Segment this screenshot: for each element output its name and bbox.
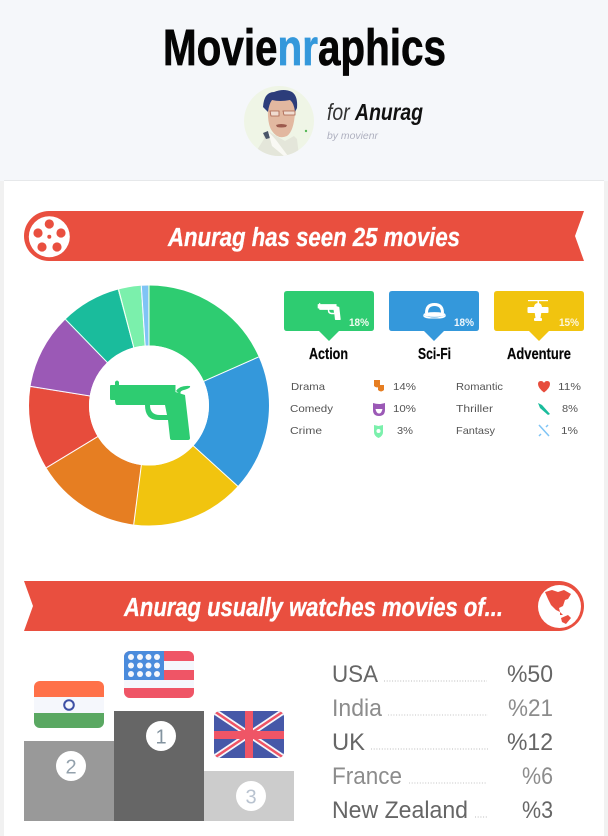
row: France: France — [332, 763, 402, 790]
row: India: India — [332, 695, 383, 722]
row: USA: USA — [332, 661, 378, 688]
banner heading: Anurag has seen 25 movies — [167, 224, 460, 252]
row: UK: UK — [332, 729, 365, 756]
row: Fantasy: 1% — [561, 425, 578, 437]
row: India: %21 — [508, 695, 553, 722]
row: New Zealand — [332, 797, 553, 824]
banner: countries — [24, 581, 584, 631]
row: Romantic — [456, 381, 581, 393]
row: France — [332, 763, 553, 790]
row: USA — [332, 661, 553, 688]
row: Thriller — [456, 403, 578, 415]
row: Drama: Drama — [291, 381, 325, 393]
country ranking list — [332, 661, 553, 824]
label: Adventure — [507, 346, 571, 363]
row: Comedy: 10% — [393, 403, 416, 415]
value: 15% — [559, 317, 579, 329]
card: Sci-Fi — [389, 291, 479, 363]
icon: plane — [528, 300, 548, 321]
icon: pistol — [110, 380, 190, 440]
row: New Zealand: New Zealand — [332, 797, 468, 824]
banner heading: Anurag usually watches movies of... — [123, 594, 503, 622]
row: Thriller: 8% — [562, 403, 578, 415]
row: Crime — [290, 425, 413, 438]
panel: header — [0, 0, 608, 181]
donut chart: genres — [30, 286, 259, 524]
icon: gun — [318, 303, 341, 320]
title: Movienraphics — [163, 19, 446, 76]
icon: UK flag — [214, 711, 284, 758]
label: Action — [309, 346, 348, 363]
row: Crime: Crime — [290, 425, 322, 437]
podium: 1st: 1 — [155, 726, 167, 748]
value: 18% — [349, 317, 369, 329]
row: Comedy — [290, 403, 416, 416]
row: UK: %12 — [507, 729, 553, 756]
label: Sci-Fi — [418, 346, 451, 363]
row: Drama — [291, 380, 416, 393]
legend: other genres — [290, 380, 581, 438]
icon: USA flag — [124, 651, 194, 698]
icon: avatar portrait — [244, 86, 314, 156]
icon: ufo — [423, 303, 446, 318]
row: Fantasy — [456, 425, 578, 437]
row: Drama: 14% — [393, 381, 416, 393]
card: Adventure — [494, 291, 584, 363]
row: France: %6 — [522, 763, 553, 790]
podium: 2nd — [24, 741, 114, 821]
row: UK — [332, 729, 553, 756]
podium: 2nd: 2 — [65, 756, 77, 778]
row: New Zealand: %3 — [522, 797, 553, 824]
podium: 1st — [114, 711, 204, 821]
banner: seen movies — [24, 211, 584, 261]
podium: 3rd — [204, 771, 294, 821]
row: Thriller: Thriller — [456, 403, 494, 415]
row: USA: %50 — [507, 661, 553, 688]
text: for Anurag: for Anurag — [327, 99, 423, 125]
icon: India flag — [34, 681, 104, 728]
icon: film reel — [29, 216, 70, 257]
row: Romantic: Romantic — [456, 381, 503, 393]
card: Action — [284, 291, 374, 363]
row: Comedy: Comedy — [290, 403, 334, 415]
podium chart — [24, 711, 294, 821]
icon: globe — [538, 585, 581, 628]
row: India — [332, 695, 553, 722]
podium: 3rd: 3 — [245, 786, 257, 808]
row: Fantasy: Fantasy — [456, 425, 496, 437]
row: Crime: 3% — [397, 425, 413, 437]
row: Romantic: 11% — [558, 381, 581, 393]
text: by movienr: by movienr — [327, 130, 378, 142]
value: 18% — [454, 317, 474, 329]
